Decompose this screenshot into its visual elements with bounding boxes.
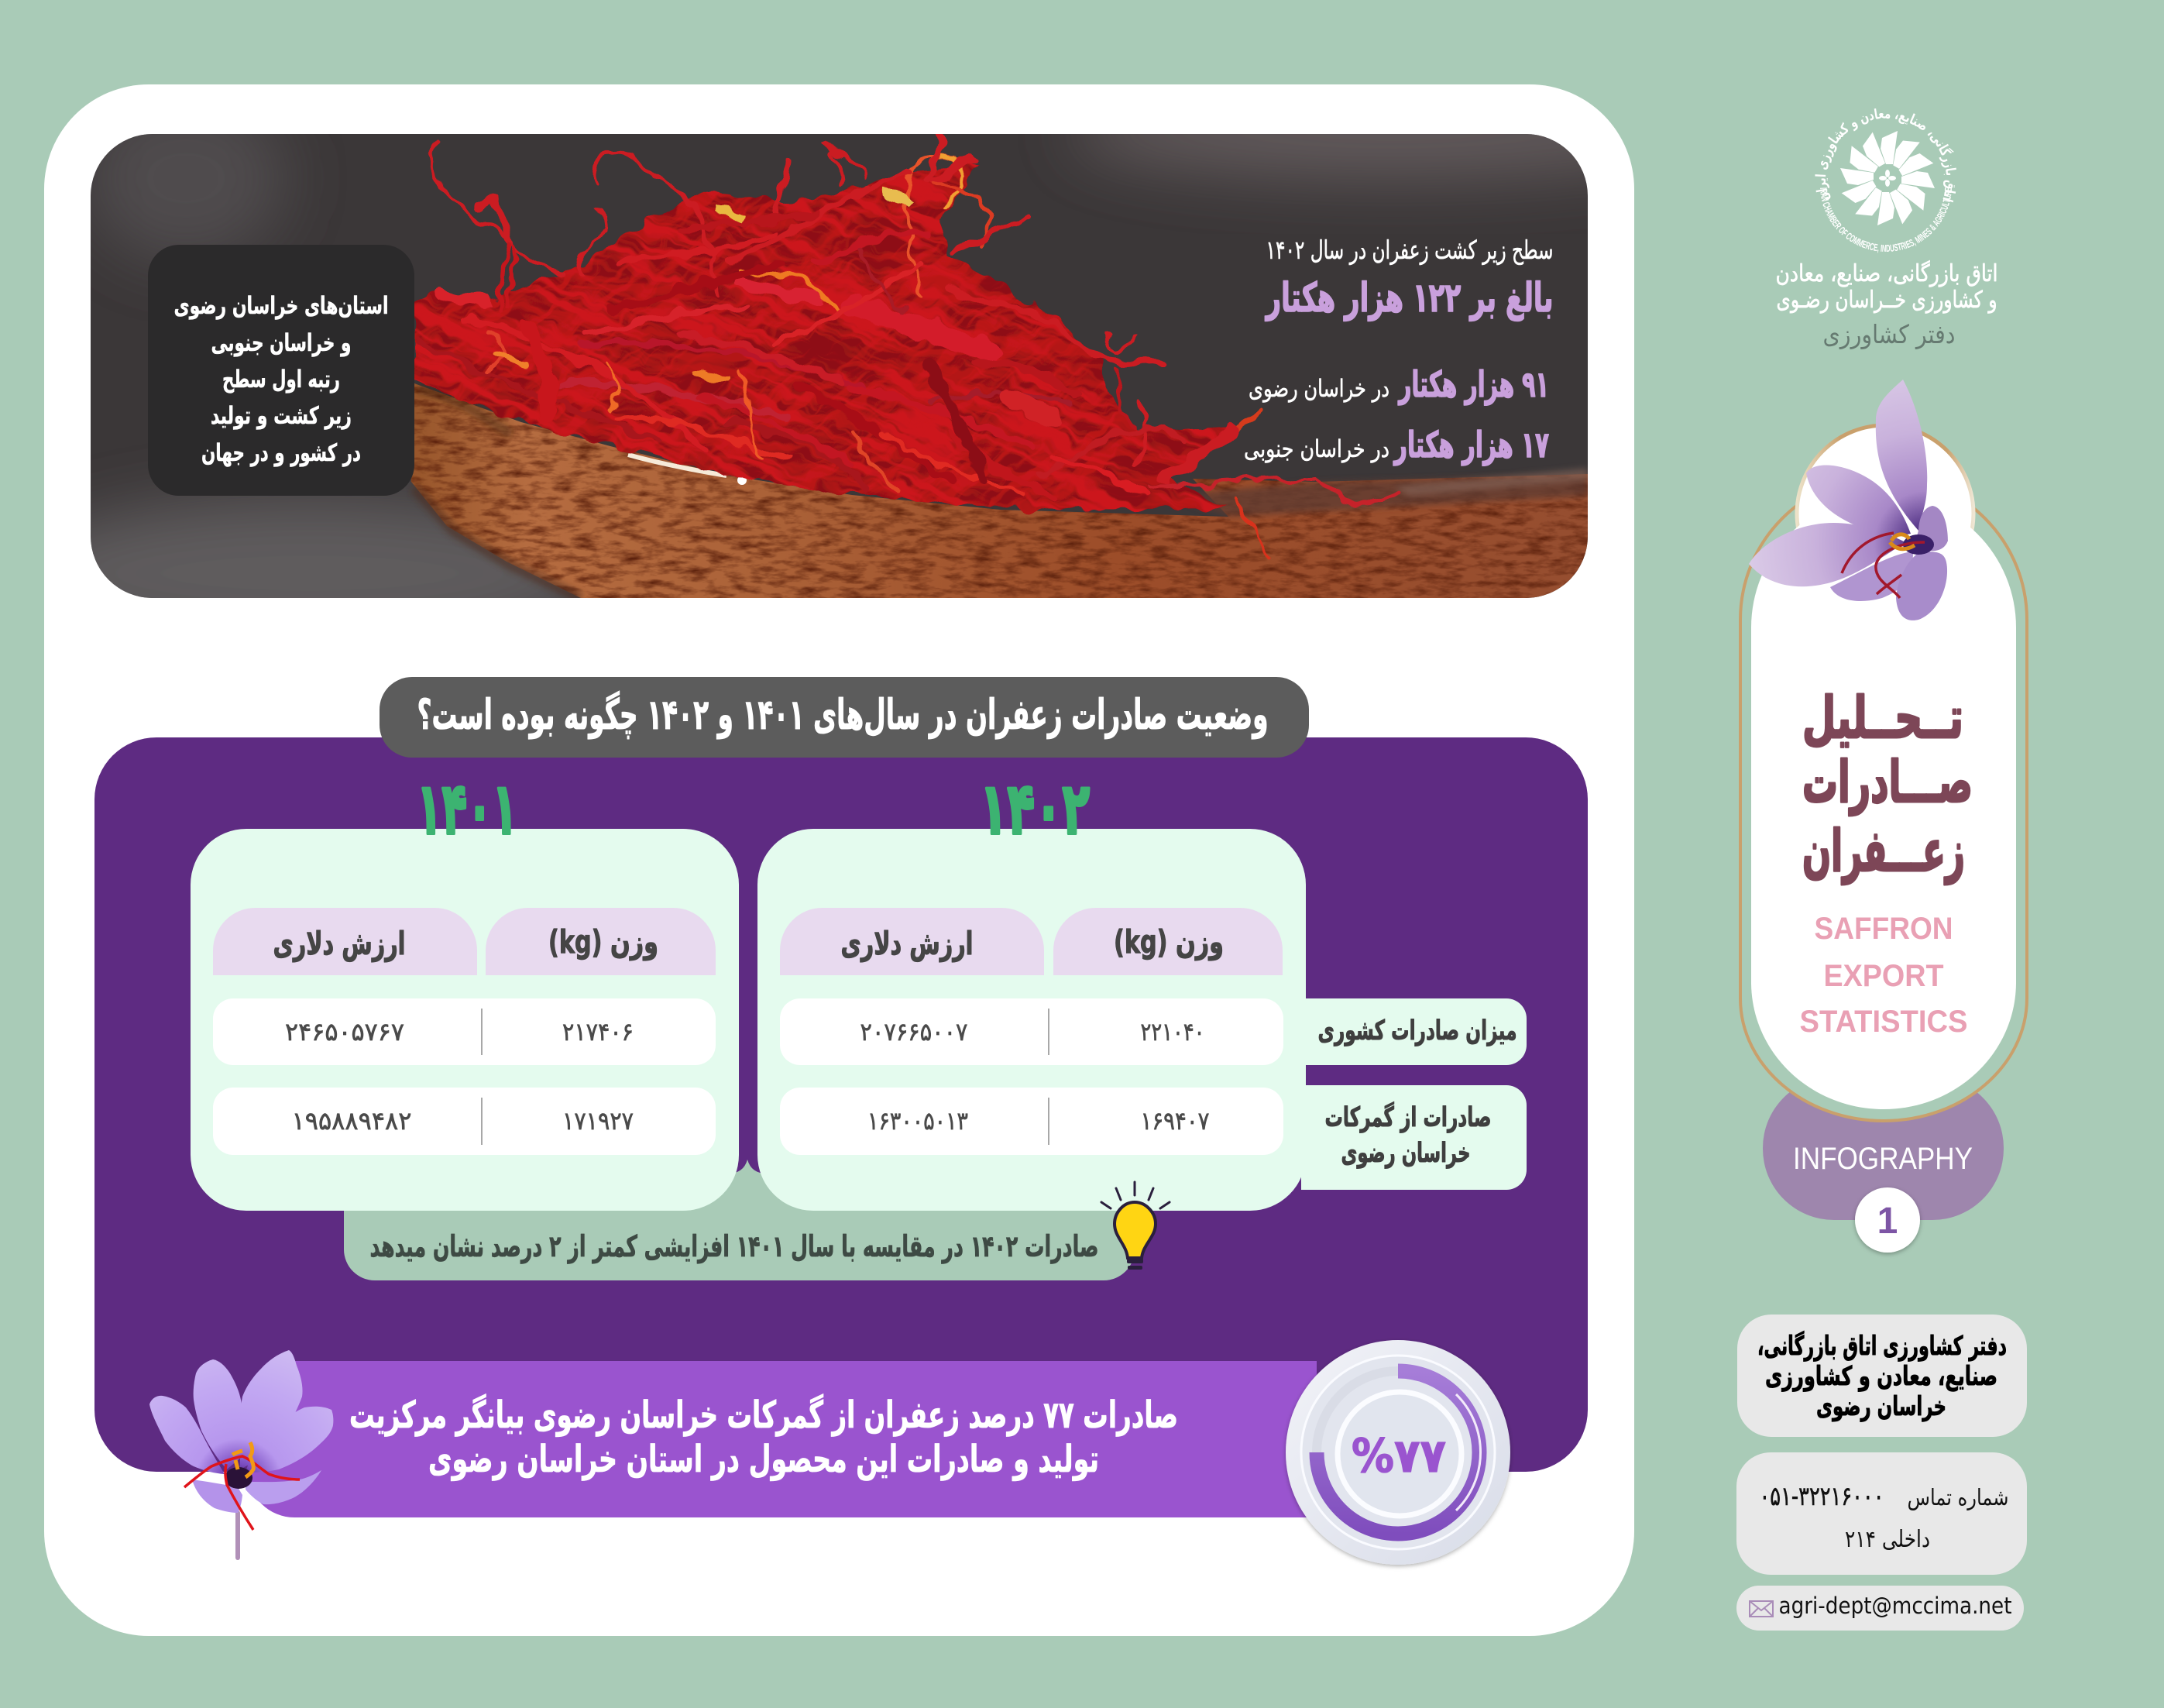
- column header: weight: [1053, 908, 1283, 975]
- title: saffron export analysis: [1802, 685, 1973, 885]
- subtitle: english title: [1800, 912, 1967, 1039]
- column header: dollar value: [780, 908, 1044, 975]
- data row: national: [780, 998, 1283, 1065]
- text block: cultivated area: [1244, 235, 1554, 466]
- panel: title pill: [1751, 495, 2016, 1109]
- year heading 1402: ۱۴۰۲: [980, 768, 1090, 851]
- row label: national exports: [1301, 998, 1527, 1065]
- organisation name: اتاق بازرگانی، صنایع، معادن: [1775, 260, 1998, 287]
- badge: number one: 1: [1877, 1201, 1898, 1242]
- data row: national: ۲۰۷۶۶۵۰۰۷: [860, 1017, 968, 1046]
- text block: cultivated area: بالغ بر ۱۲۲ هزار هکتار: [1265, 275, 1554, 321]
- heading pill: وضعیت صادرات زعفران در سال‌های ۱۴۰۱ و ۱۴۰۲ چگونه بوده است؟: [417, 690, 1269, 739]
- spoon: [409, 383, 1588, 598]
- contact: phone: شماره تماس: [1907, 1484, 2009, 1510]
- text block: cultivated area: ۹۱ هزار هکتار: [1398, 363, 1549, 405]
- saffron heap: [414, 134, 1400, 559]
- infography badge: INFOGRAPHY: [1793, 1142, 1973, 1176]
- row label: Khorasan Razavi customs exports: [1301, 1085, 1527, 1190]
- icon: saffron flower: [1749, 380, 1948, 620]
- subtitle: english title: STATISTICS: [1800, 1005, 1967, 1039]
- data row: national: ۲۱۷۴۰۶: [562, 1017, 634, 1046]
- chart: 77 percent donut: %۷۷: [1352, 1429, 1446, 1483]
- column header: dollar value: ارزش دلاری: [841, 925, 973, 962]
- callout: provinces rank first: [148, 245, 414, 496]
- logo: chamber of commerce emblem: اتاق بازرگانی، صنایع، معادن و کشاورزی ایران: [1815, 108, 1956, 203]
- icon: envelope: [1750, 1601, 1773, 1617]
- column header: weight: وزن (kg): [1114, 923, 1224, 961]
- gold outlined arch: [1740, 476, 2027, 1121]
- badge: number one: [1855, 1187, 1920, 1253]
- data row: customs: ۱۶۳۰۰۵۰۱۳: [867, 1106, 968, 1136]
- organisation name: و کشاورزی خــراسان رضـوی: [1777, 287, 1997, 314]
- title: saffron export analysis: تــحــلیل: [1802, 685, 1963, 751]
- year heading 1401: ۱۴۰۱: [417, 768, 517, 851]
- contact: office name: دفتر کشاورزی اتاق بازرگانی،: [1757, 1331, 2007, 1362]
- data row: customs: [780, 1088, 1283, 1155]
- title: saffron export analysis: زعـــفران: [1802, 818, 1965, 885]
- callout: provinces rank first: و خراسان جنوبی: [211, 329, 352, 357]
- icon: light bulb: [1101, 1182, 1170, 1270]
- table card: year 1402: [757, 768, 1306, 1211]
- logo: chamber of commerce emblem: [1815, 108, 1956, 253]
- text block: cultivated area: سطح زیر کشت زعفران در سال ۱۴۰۲: [1266, 235, 1554, 265]
- contact: phone: ۰۵۱-۳۲۲۱۶۰۰۰: [1760, 1481, 1884, 1512]
- table card: year 1401: [191, 768, 739, 1211]
- row label: Khorasan Razavi customs exports: خراسان رضوی: [1341, 1138, 1470, 1169]
- organisation name: [1775, 260, 1998, 349]
- gold ring: [1797, 425, 1973, 602]
- callout: provinces rank first: استان‌های خراسان رضوی: [173, 292, 389, 320]
- subtitle: english title: SAFFRON: [1814, 912, 1953, 946]
- chart: 77 percent donut: [1286, 1340, 1510, 1565]
- contact: office name: خراسان رضوی: [1816, 1391, 1946, 1422]
- text block: cultivated area: ۱۷ هزار هکتار: [1393, 424, 1549, 466]
- banner: 77 percent of exports: [248, 1361, 1317, 1517]
- data row: customs: [213, 1088, 716, 1155]
- text block: cultivated area: در خراسان جنوبی: [1244, 435, 1389, 463]
- icon: saffron flower in banner: [149, 1350, 333, 1560]
- contact: phone: [1736, 1452, 2027, 1575]
- callout: provinces rank first: زیر کشت و تولید: [211, 402, 352, 430]
- column header: dollar value: ارزش دلاری: [273, 925, 406, 962]
- panel: main white card: [44, 84, 1634, 1636]
- data row: customs: ۱۶۹۴۰۷: [1140, 1106, 1210, 1136]
- panel: purple export section: [94, 737, 1588, 1472]
- note bar: growth below two percent: [344, 1160, 1135, 1280]
- contact: email: agri-dept@mccima.net: [1778, 1593, 2012, 1619]
- title: saffron export analysis: صـــادرات: [1802, 749, 1973, 816]
- data row: national: [213, 998, 716, 1065]
- column header: dollar value: [213, 908, 477, 975]
- text block: cultivated area: در خراسان رضوی: [1249, 375, 1389, 403]
- column header: weight: وزن (kg): [548, 923, 658, 961]
- banner: 77 percent of exports: صادرات ۷۷ درصد زعفران از گمرکات خراسان رضوی بیانگر مرکزیت: [349, 1394, 1178, 1437]
- logo: chamber of commerce emblem: IRAN CHAMBER OF COMMERCE, INDUSTRIES, MINES & AGRICULTURE: [1820, 187, 1952, 253]
- banner: 77 percent of exports: تولید و صادرات این محصول در استان خراسان رضوی: [428, 1438, 1099, 1481]
- data row: national: ۲۲۱۰۴۰: [1140, 1017, 1205, 1046]
- data row: customs: ۱۷۱۹۲۷: [562, 1106, 634, 1136]
- callout: provinces rank first: در کشور و در جهان: [201, 439, 361, 467]
- organisation name: دفتر کشاورزی: [1823, 319, 1955, 349]
- panel: hero saffron photo: [91, 134, 1588, 598]
- heading pill: [380, 677, 1309, 758]
- note bar: growth below two percent: صادرات ۱۴۰۲ در مقایسه با سال ۱۴۰۱ افزایشی کمتر از ۲ درصد نشان میدهد: [370, 1229, 1098, 1263]
- column header: weight: [486, 908, 716, 975]
- data row: customs: ۱۹۵۸۸۹۴۸۲: [291, 1106, 412, 1136]
- subtitle: english title: EXPORT: [1823, 959, 1944, 993]
- row label: Khorasan Razavi customs exports: صادرات از گمرکات: [1324, 1101, 1492, 1133]
- contact: phone: داخلی ۲۱۴: [1845, 1526, 1930, 1553]
- contact: office name: [1737, 1315, 2027, 1437]
- infography badge: [1763, 1077, 2004, 1220]
- row label: national exports: میزان صادرات کشوری: [1318, 1016, 1517, 1046]
- callout: provinces rank first: رتبه اول سطح: [222, 366, 340, 393]
- contact: office name: صنایع، معادن و کشاورزی: [1765, 1361, 1997, 1392]
- data row: national: ۲۴۶۵۰۵۷۶۷: [285, 1017, 404, 1046]
- contact: email: [1736, 1586, 2024, 1631]
